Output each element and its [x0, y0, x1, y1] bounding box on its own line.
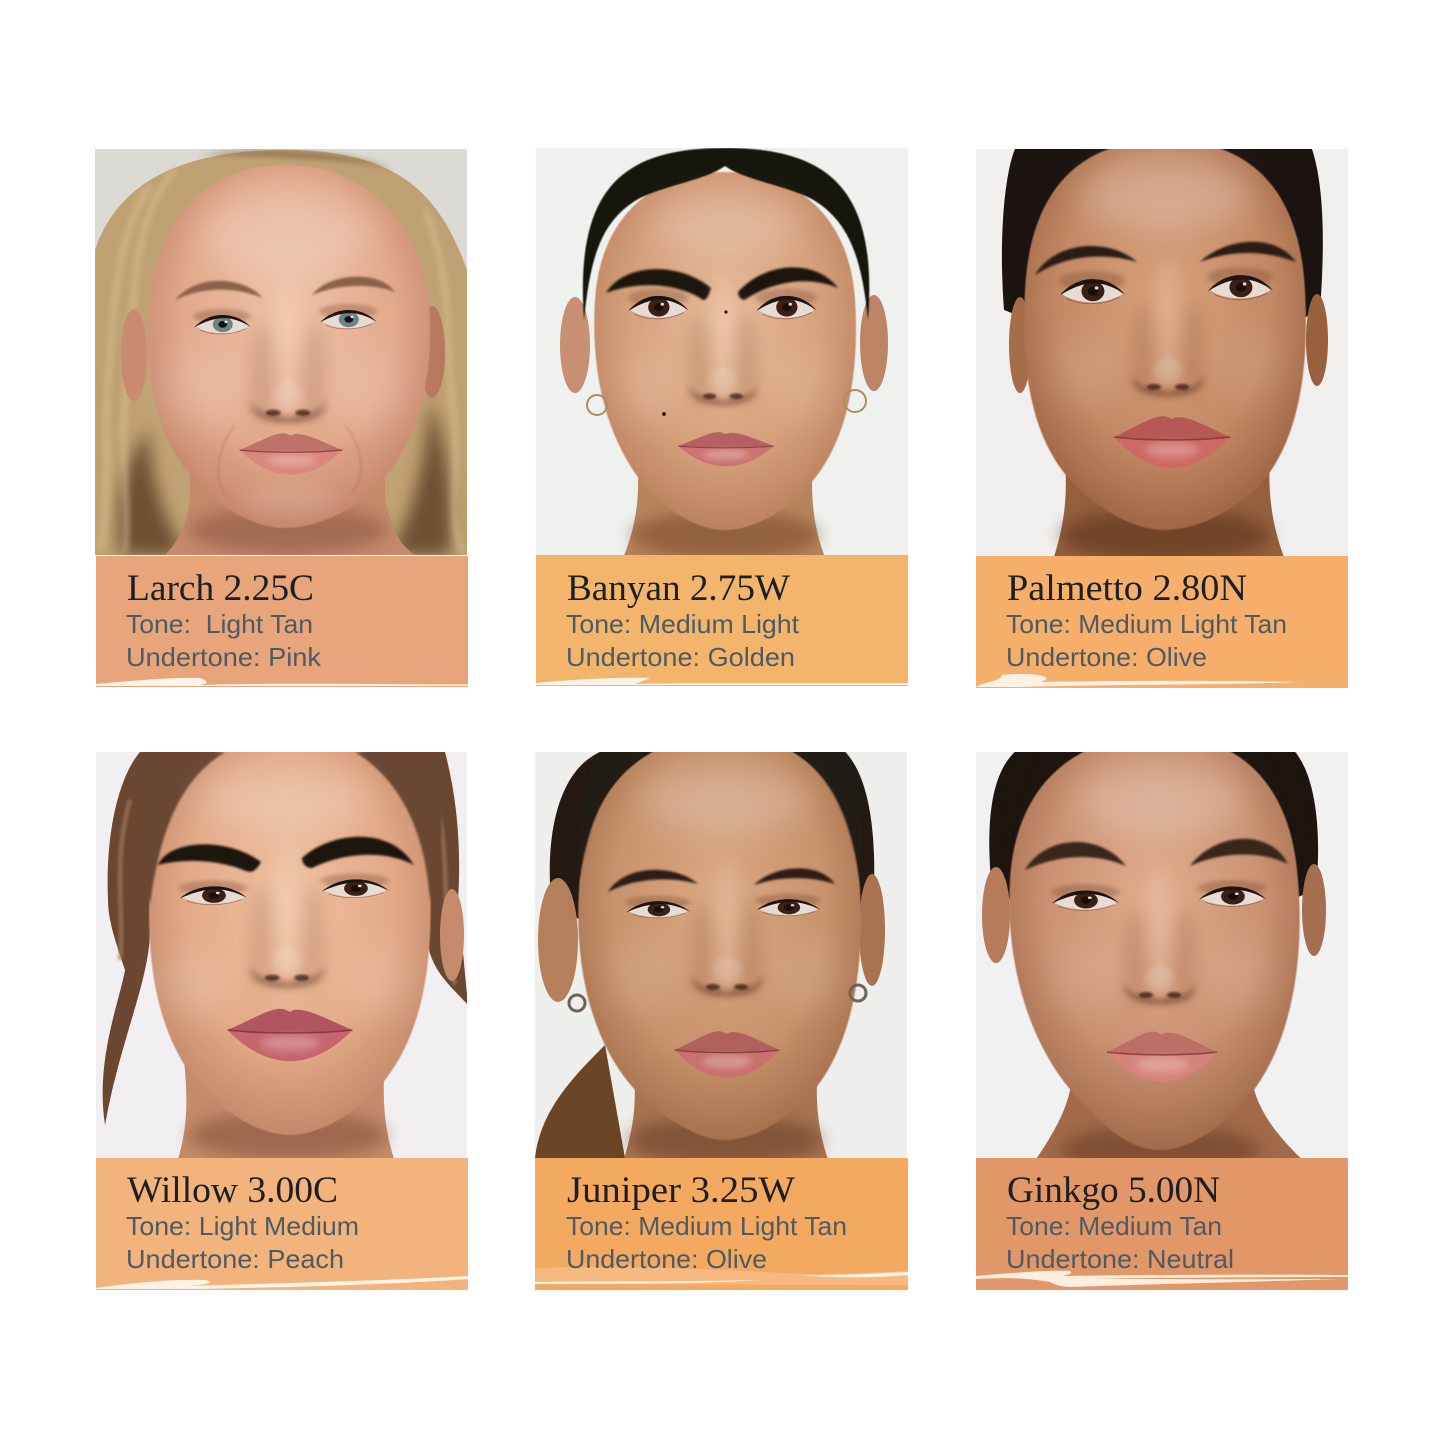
portrait photo: Willow — [96, 735, 468, 1165]
shade name: Palmetto 2.80N — [1007, 568, 1247, 609]
foundation swatch: Larch — [96, 556, 468, 687]
earrings — [587, 390, 866, 415]
foundation swatch: Palmetto — [976, 556, 1348, 688]
swatch gloss streak — [976, 1271, 1348, 1287]
tone label: Tone: Medium Light Tan — [566, 1211, 847, 1241]
panel: Larch 2.25C — [95, 149, 468, 687]
tone label: Tone: Medium Light Tan — [1006, 609, 1287, 639]
shade name: Larch 2.25C — [127, 568, 314, 609]
tone label: Tone: Light Tan — [126, 609, 313, 639]
portrait photo: Ginkgo — [976, 735, 1348, 1174]
shade name: Ginkgo 5.00N — [1007, 1170, 1220, 1211]
earrings — [569, 985, 866, 1011]
shade name: Juniper 3.25W — [567, 1170, 795, 1211]
portrait photo: Larch — [95, 149, 467, 555]
tone label: Tone: Medium Light — [566, 609, 800, 639]
swatch gloss streak — [96, 1276, 468, 1289]
shade name: Willow 3.00C — [127, 1170, 338, 1211]
foundation swatch: Willow — [96, 1158, 468, 1290]
shade name: Banyan 2.75W — [567, 568, 790, 609]
panel: Juniper 3.25W — [535, 735, 908, 1290]
undertone label: Undertone: Golden — [566, 642, 795, 672]
undertone label: Undertone: Peach — [126, 1244, 344, 1274]
tone label: Tone: Light Medium — [126, 1211, 359, 1241]
swatch shade band — [535, 1267, 908, 1285]
foundation swatch: Ginkgo — [976, 1158, 1348, 1290]
swatch gloss streak — [536, 678, 908, 685]
undertone label: Undertone: Olive — [1006, 642, 1207, 672]
swatch gloss streak — [976, 674, 1300, 687]
swatch gloss streak — [535, 1272, 908, 1284]
panel: Palmetto 2.80N — [976, 140, 1348, 688]
portrait photo: Banyan — [536, 148, 908, 560]
portrait photo: Palmetto — [976, 140, 1348, 561]
undertone label: Undertone: Neutral — [1006, 1244, 1234, 1274]
undertone label: Undertone: Olive — [566, 1244, 767, 1274]
undertone label: Undertone: Pink — [126, 642, 322, 672]
panel: Ginkgo 5.00N — [976, 735, 1348, 1290]
panel: Willow 3.00C — [96, 735, 468, 1290]
foundation swatch: Banyan — [536, 555, 908, 686]
panel: Banyan 2.75W — [536, 148, 908, 686]
foundation swatch: Juniper — [535, 1158, 908, 1290]
portrait photo: Juniper — [535, 735, 907, 1165]
tone label: Tone: Medium Tan — [1006, 1211, 1222, 1241]
swatch gloss streak — [96, 678, 468, 686]
